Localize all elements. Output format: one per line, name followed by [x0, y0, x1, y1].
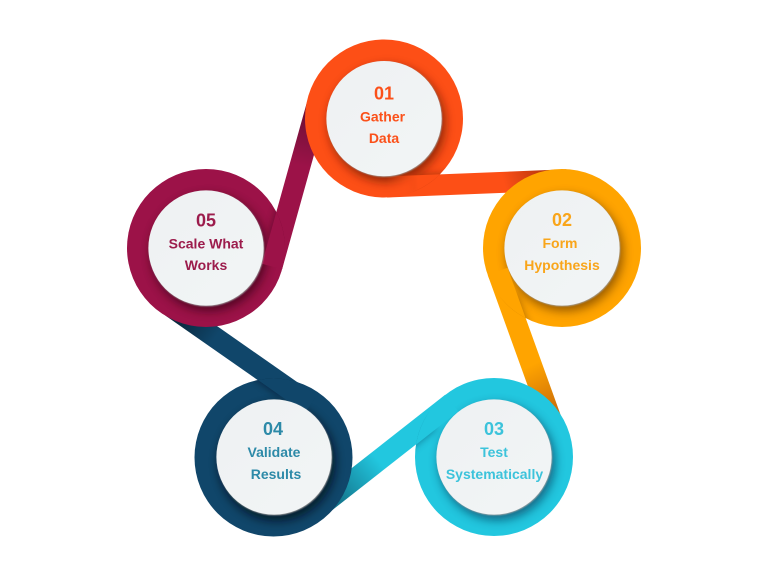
step 04: Validate Results [194, 378, 352, 536]
number and label 01 [360, 84, 406, 146]
number and label 03 [446, 419, 543, 482]
number and label 05: Scale What [169, 236, 244, 252]
number and label 04: Validate [248, 444, 301, 460]
number and label 02: 02 [552, 210, 572, 230]
number and label 03: Test [480, 444, 508, 460]
number and label 01: Gather [360, 108, 406, 124]
number and label 03: Systematically [446, 466, 543, 482]
number and label 02 [524, 210, 600, 273]
step 05: Scale What Works [127, 169, 298, 327]
ribbon: 03 to 04 [319, 395, 458, 510]
step 01: Gather Data [305, 40, 467, 198]
number and label 04: Results [251, 466, 301, 482]
number and label 02: Form [542, 235, 578, 251]
number and label 05 [169, 210, 244, 273]
number and label 05: 05 [196, 210, 216, 230]
ribbon: 01 to 02 [386, 169, 567, 198]
step 03: Test Systematically [415, 378, 573, 536]
number and label 03: 03 [484, 419, 504, 439]
ribbon: 04 to 05 [165, 298, 317, 413]
ribbon: 02 to 03 [488, 268, 563, 429]
number and label 04 [248, 419, 301, 482]
number and label 05: Works [185, 257, 227, 273]
number and label 04: 04 [263, 419, 283, 439]
step 02: Form Hypothesis [483, 169, 641, 327]
ribbon: 05 to 01 [262, 104, 327, 269]
number and label 01: 01 [374, 84, 394, 104]
number and label 01: Data [369, 130, 399, 146]
number and label 02: Hypothesis [524, 257, 600, 273]
